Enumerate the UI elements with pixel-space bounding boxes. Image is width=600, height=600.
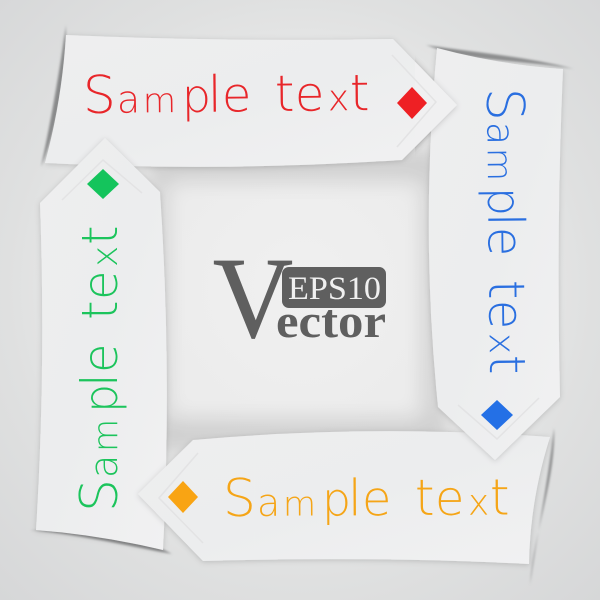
right banner text: p <box>477 187 531 216</box>
bottom banner text: t <box>415 469 435 527</box>
left banner text: a <box>82 455 126 478</box>
word: ector: ector <box>276 295 386 348</box>
left banner paper <box>36 138 167 550</box>
top banner chevron <box>392 55 436 147</box>
bottom banner text: e <box>435 471 465 527</box>
slit: right banner top <box>426 45 574 69</box>
top banner text: t <box>275 65 295 123</box>
panel: left banner <box>30 138 172 554</box>
right banner text: l <box>476 213 534 227</box>
left banner text: t <box>71 225 129 245</box>
right banner text: S <box>474 88 534 121</box>
right banner text: e <box>476 227 533 257</box>
top banner paper <box>45 35 457 167</box>
left banner text: p <box>74 384 128 413</box>
icon: green diamond <box>87 169 119 199</box>
right banner text: x <box>481 333 522 354</box>
top banner text: p <box>182 69 211 123</box>
panel: right banner <box>426 45 574 460</box>
right banner chevron <box>458 398 539 439</box>
logo letter V: V <box>213 235 293 362</box>
logo: EPS10 Vector <box>213 235 386 362</box>
left banner text: x <box>85 246 126 267</box>
left banner text: m <box>86 419 126 452</box>
bottom banner text: t <box>490 468 510 527</box>
bottom banner text: a <box>257 481 280 525</box>
bottom banner text: m <box>283 485 316 525</box>
EPS10 label: EPS10 <box>288 271 381 307</box>
bottom banner paper <box>138 431 550 564</box>
left banner text: S <box>70 479 130 512</box>
slit: top banner left <box>41 25 66 167</box>
top banner arrow tip overlay <box>415 60 458 150</box>
right banner text: t <box>477 280 535 300</box>
right banner text: a <box>478 122 523 145</box>
left banner chevron <box>62 160 142 200</box>
icon: red diamond <box>397 87 427 119</box>
inner frame shadow <box>150 150 445 450</box>
slit: bottom banner right <box>530 428 554 585</box>
bottom banner text: e <box>362 471 392 527</box>
bottom banner text: l <box>348 469 362 527</box>
top banner text: S <box>83 66 116 126</box>
top banner text: x <box>328 78 349 119</box>
icon: orange diamond <box>168 481 198 513</box>
top banner text: e <box>295 66 325 123</box>
right banner text: t <box>478 355 536 375</box>
bottom banner text: x <box>468 483 489 524</box>
bottom banner chevron <box>159 453 203 543</box>
top banner text: a <box>117 77 140 122</box>
EPS10 badge <box>282 267 386 308</box>
right banner text: e <box>477 300 534 330</box>
top banner text: e <box>222 67 252 124</box>
panel: top banner <box>41 25 457 167</box>
right banner paper <box>429 48 563 460</box>
top banner text: l <box>208 66 222 124</box>
icon: blue diamond <box>481 400 513 430</box>
left banner text: t <box>71 300 129 320</box>
slit: left banner bottom <box>30 530 172 554</box>
top banner text: m <box>143 81 176 121</box>
left banner text: l <box>71 373 129 387</box>
panel: bottom banner <box>138 428 554 585</box>
left banner text: e <box>73 343 129 373</box>
top banner text: t <box>350 64 370 122</box>
right banner text: m <box>479 148 519 181</box>
bottom banner text: S <box>223 469 256 529</box>
bottom banner text: p <box>322 472 351 526</box>
left banner text: e <box>73 270 129 300</box>
